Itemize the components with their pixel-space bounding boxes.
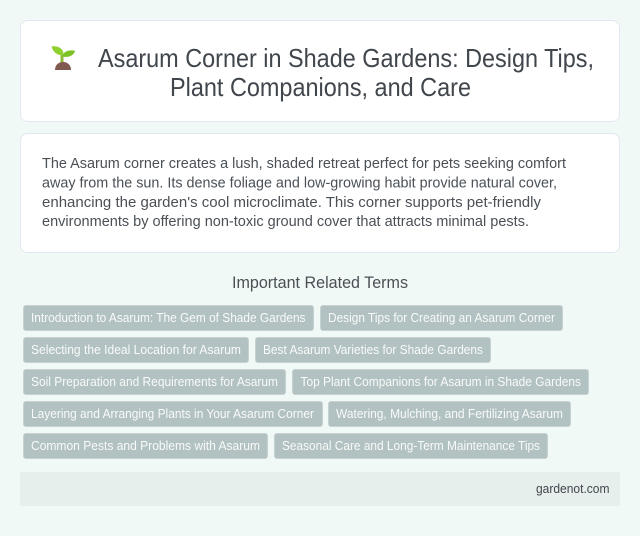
- tag list: related terms: Selecting the Ideal Location for Asarum: [31, 342, 241, 357]
- tag list: related terms: Soil Preparation and Requirements for Asarum: [31, 374, 278, 389]
- tag list: related terms: Seasonal Care and Long-Term Maintenance Tips: [282, 438, 540, 453]
- footer: [20, 472, 620, 506]
- panel: title card: [20, 20, 620, 122]
- heading: related terms: Important Related Terms: [232, 274, 408, 292]
- text block: description: away from the sun. Its dense foliage and low-growing habit provide natural cover,: [42, 174, 557, 192]
- text block: description: environments by offering non-toxic ground cover that attracts minimal pests.: [42, 213, 529, 230]
- footer: site name: gardenot.com: [536, 481, 610, 496]
- title: [98, 43, 594, 102]
- text block: description: enhancing the garden's cool microclimate. This corner supports pet-friendly: [42, 194, 541, 211]
- title: Asarum Corner in Shade Gardens: Design Tips,: [98, 43, 594, 73]
- tag list: related terms: Best Asarum Varieties for Shade Gardens: [263, 342, 483, 357]
- tag list: related terms: Watering, Mulching, and Fertilizing Asarum: [336, 406, 563, 421]
- text block: description: [42, 155, 567, 230]
- tag list: related terms: Top Plant Companions for Asarum in Shade Gardens: [300, 374, 581, 389]
- text block: description: The Asarum corner creates a lush, shaded retreat perfect for pets seeking comfort: [42, 155, 567, 172]
- tag list: related terms: Design Tips for Creating an Asarum Corner: [328, 310, 556, 325]
- title: Plant Companions, and Care: [170, 72, 471, 102]
- icon: seedling: [52, 46, 75, 70]
- tag list: related terms: [24, 306, 588, 458]
- tag list: related terms: Common Pests and Problems with Asarum: [31, 438, 260, 453]
- tag list: related terms: Introduction to Asarum: The Gem of Shade Gardens: [31, 310, 306, 325]
- tag list: related terms: Layering and Arranging Plants in Your Asarum Corner: [31, 406, 315, 421]
- panel: description: [20, 134, 620, 252]
